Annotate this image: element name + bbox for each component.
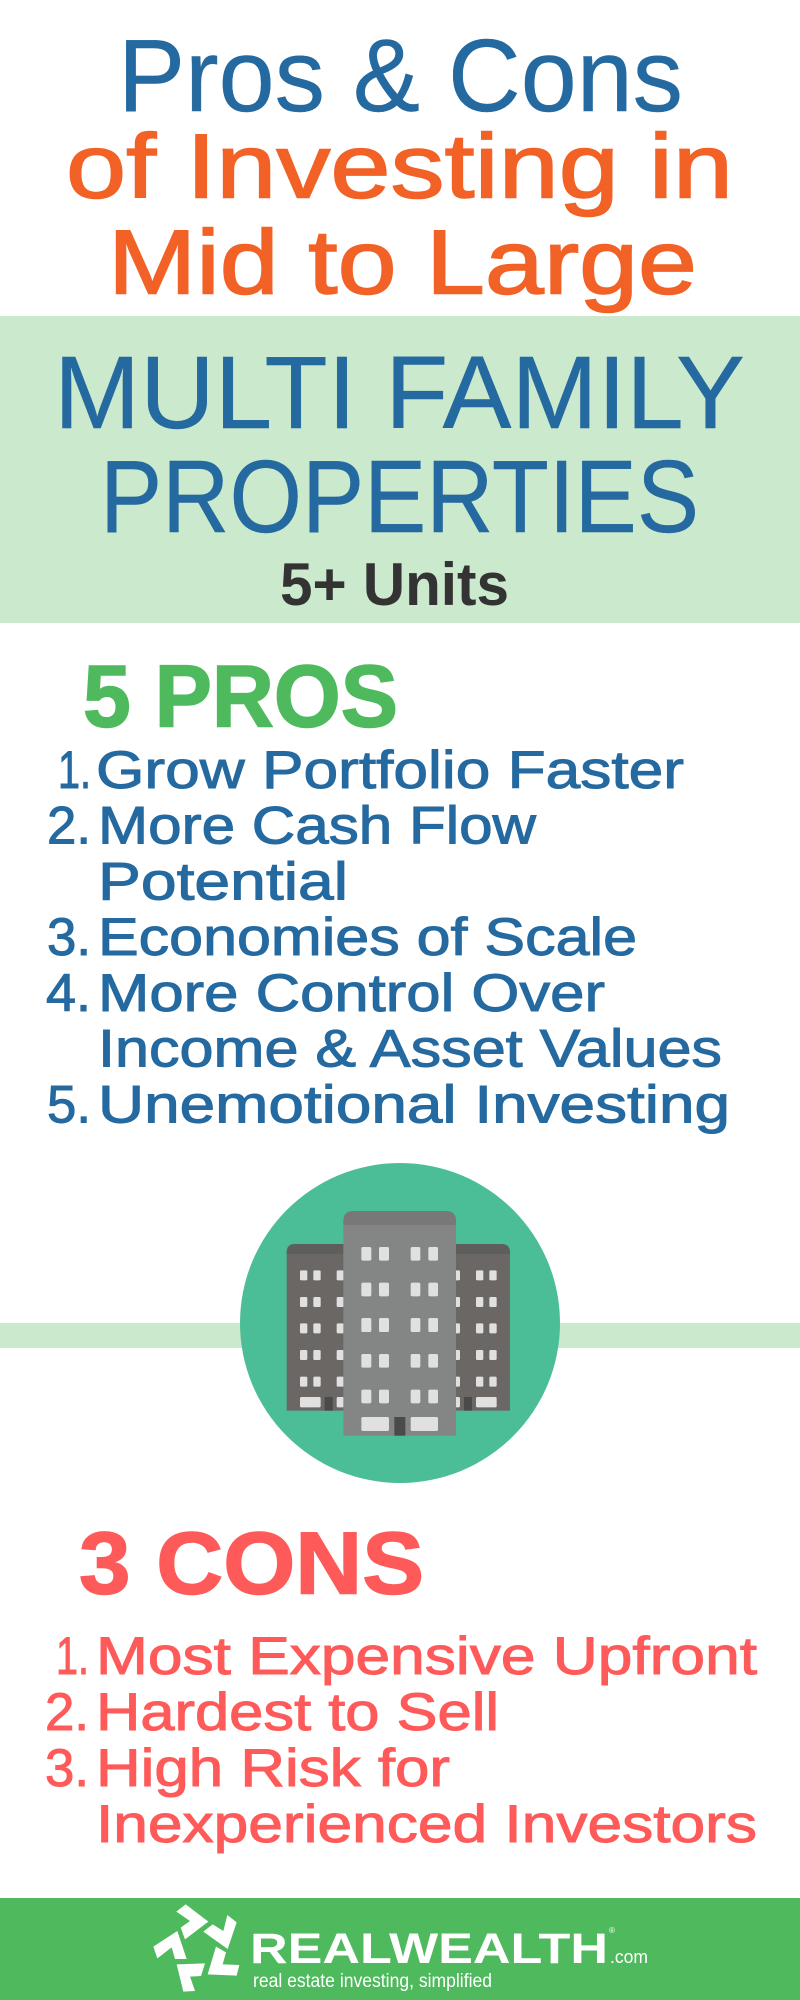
title xyxy=(66,18,733,314)
list: pros: 2. xyxy=(47,797,91,856)
title: Mid to Large xyxy=(108,212,697,314)
subheading: units: 5+ Units xyxy=(280,551,509,618)
list: pros xyxy=(46,741,730,1134)
list: cons: Inexperienced Investors xyxy=(96,1795,757,1854)
heading: 3 cons: 3 CONS xyxy=(79,1514,424,1612)
list: pros: Unemotional Investing xyxy=(98,1075,730,1134)
left and right rear buildings xyxy=(287,1244,510,1411)
list: pros: Income & Asset Values xyxy=(98,1020,722,1079)
title: of Investing in xyxy=(66,116,733,218)
list: pros: Economies of Scale xyxy=(98,908,637,967)
heading: multi family properties xyxy=(54,335,745,554)
icon: realwealth logo xyxy=(153,1904,239,1992)
logo wordmark: .com xyxy=(610,1947,648,1967)
icon: apartment buildings xyxy=(240,1163,560,1483)
list: cons: 3. xyxy=(45,1739,89,1798)
list: pros: More Cash Flow xyxy=(98,797,537,856)
list: pros: Grow Portfolio Faster xyxy=(96,741,684,800)
logo wordmark: REALWEALTH xyxy=(250,1925,608,1973)
list: cons xyxy=(45,1627,757,1854)
logo wordmark xyxy=(250,1925,648,1992)
center front building xyxy=(343,1211,456,1436)
title: Pros & Cons xyxy=(118,18,683,133)
heading: multi family properties: MULTI FAMILY xyxy=(54,335,745,450)
list: pros: 4. xyxy=(46,964,91,1023)
logo wordmark: real estate investing, simplified xyxy=(253,1971,492,1992)
list: pros: 5. xyxy=(47,1075,91,1134)
list: pros: 3. xyxy=(47,908,91,967)
list: cons: Most Expensive Upfront xyxy=(96,1627,757,1686)
heading: multi family properties: PROPERTIES xyxy=(100,439,699,554)
list: cons: 2. xyxy=(45,1683,89,1742)
panel: multi family properties band xyxy=(0,316,800,623)
list: cons: High Risk for xyxy=(96,1739,450,1798)
heading: 5 pros: 5 PROS xyxy=(83,646,398,746)
list: pros: 1. xyxy=(58,741,91,800)
panel: footer xyxy=(0,1898,800,2000)
list: cons: Hardest to Sell xyxy=(96,1683,499,1742)
list: cons: 1. xyxy=(56,1627,89,1686)
logo wordmark: ® xyxy=(609,1926,615,1935)
list: pros: Potential xyxy=(98,852,348,911)
list: pros: More Control Over xyxy=(98,964,605,1023)
